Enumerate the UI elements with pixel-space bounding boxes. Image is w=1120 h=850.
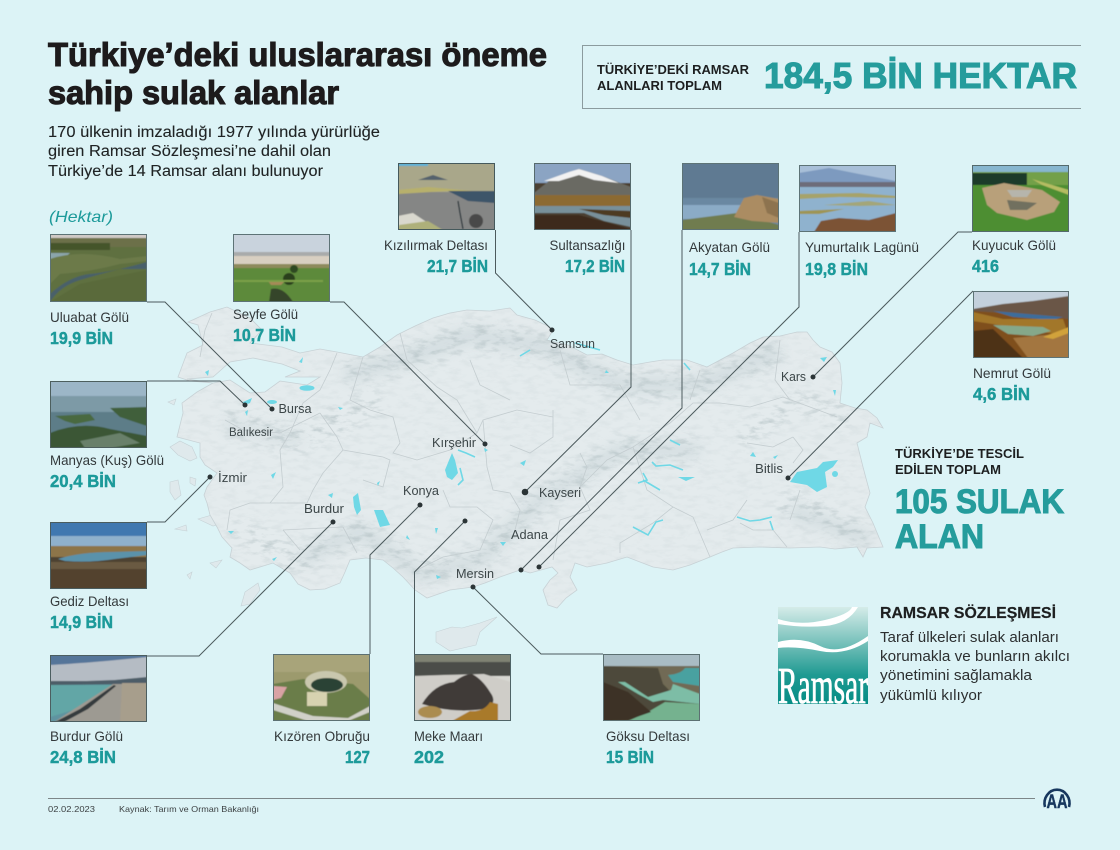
map city label: Bursa: Bursa: [278, 402, 312, 416]
photo: Gediz Deltası: [50, 522, 147, 589]
registered label: [895, 446, 1024, 477]
leader line: Yumurtalık Lagünü: [536, 232, 799, 570]
leader line: Gediz Deltası to İzmir: [147, 474, 212, 522]
lake: Beyşehir: [353, 493, 361, 515]
value: 10,7 BİN: [233, 325, 296, 345]
name: Burdur Gölü: [50, 728, 123, 744]
photo: Göksu Deltası: [603, 654, 700, 721]
name: Yumurtalık Lagünü: [805, 239, 919, 255]
registered label: TÜRKİYE’DE TESCİL: [895, 446, 1024, 461]
value: 21,7 BİN: [427, 256, 488, 276]
lake: Suğla: [374, 510, 390, 527]
photo: Kızören Obruğu: [273, 654, 370, 721]
name: Kuyucuk Gölü: [972, 237, 1056, 253]
name: Akyatan Gölü: [689, 239, 770, 255]
name: Meke Maarı: [414, 728, 483, 744]
map city label: Kırşehir: Kırşehir: [432, 436, 476, 450]
card: Gediz Deltası: [50, 522, 147, 632]
leader line: Kızören Obruğu to Konya: [370, 502, 422, 654]
subtitle text: [48, 124, 380, 180]
leader line: Kuyucuk Gölü to Kars: [810, 232, 972, 380]
photo: Uluabat Gölü: [50, 234, 147, 302]
name: Nemrut Gölü: [973, 365, 1051, 381]
value: 15 BİN: [606, 747, 654, 767]
name: Kızören Obruğu: [274, 728, 370, 744]
map city label: Balıkesir: Balıkesir: [229, 427, 273, 439]
name: Manyas (Kuş) Gölü: [50, 452, 164, 468]
subtitle text: 170 ülkenin imzaladığı 1977 yılında yürürlüğe: [48, 124, 380, 141]
panel: Ramsar Convention: [778, 603, 1070, 715]
lake: Erçek: [832, 471, 838, 477]
leader line: Sultansazlığı to Kayseri: [522, 230, 631, 495]
map: land silhouette: [177, 307, 883, 608]
map: province borders: [200, 313, 837, 570]
lake: Van: [790, 460, 838, 492]
footer source: Kaynak: Tarım ve Orman Bakanlığı: [119, 804, 259, 814]
value: 24,8 BİN: [50, 747, 116, 767]
panel: total Ramsar area: [582, 46, 1081, 108]
card: Göksu Deltası: [603, 654, 700, 767]
map: Turkey relief map: [150, 300, 890, 651]
name: Gediz Deltası: [50, 593, 129, 609]
map: islands and Cyprus: [168, 399, 497, 651]
photo: Sultansazlığı: [534, 163, 631, 230]
lake: Tuz: [445, 453, 458, 480]
value: 14,7 BİN: [689, 259, 751, 279]
leader line: Meke Maarı: [414, 518, 468, 654]
map city label: Samsun: Samsun: [550, 337, 595, 351]
Ramsar heading: RAMSAR SÖZLEŞMESİ: [880, 603, 1056, 622]
title: Türkiye’deki uluslararası öneme: [48, 36, 547, 73]
Ramsar description: korumakla ve bunların akılcı: [880, 648, 1070, 665]
Ramsar description: [880, 629, 1070, 704]
title: [48, 36, 547, 111]
photo: Kızılırmak Deltası: [398, 163, 495, 230]
map city label: Kars: Kars: [781, 370, 806, 384]
value: 14,9 BİN: [50, 612, 113, 632]
total label: [597, 62, 749, 93]
value: 19,8 BİN: [805, 259, 868, 279]
name: Seyfe Gölü: [233, 306, 298, 322]
map: rivers and dam reservoirs: [458, 343, 773, 535]
value: 4,6 BİN: [973, 384, 1030, 404]
name: Uluabat Gölü: [50, 309, 129, 325]
leader line: Akyatan Gölü to Adana: [518, 230, 682, 572]
panel: registered wetlands total: [895, 446, 1064, 556]
card: Sultansazlığı: [534, 163, 631, 276]
value: 19,9 BİN: [50, 328, 113, 348]
map: mountain relief texture: [220, 314, 876, 586]
leader line: Göksu Deltası to Mersin: [470, 584, 603, 654]
registered value: 105 SULAK: [895, 483, 1064, 521]
value: 202: [414, 747, 444, 767]
map city label: İzmir: İzmir: [218, 471, 247, 485]
Ramsar description: yükümlü kılıyor: [880, 687, 982, 704]
registered label: EDİLEN TOPLAM: [895, 462, 1001, 477]
lake: İznik: [300, 385, 314, 391]
map city label: Konya: Konya: [403, 484, 439, 498]
value: 20,4 BİN: [50, 471, 116, 491]
registered value: ALAN: [895, 518, 984, 556]
photo: Akyatan Gölü: [682, 163, 779, 230]
photo: Seyfe Gölü: [233, 234, 330, 302]
card: Kuyucuk Gölü: [972, 165, 1069, 276]
value: 416: [972, 256, 999, 276]
card: Yumurtalık Lagünü: [799, 165, 919, 279]
card: Kızılırmak Deltası: [384, 163, 495, 276]
lake: Manyas: [243, 398, 252, 405]
value: 127: [345, 747, 370, 767]
name: Kızılırmak Deltası: [384, 237, 488, 253]
leader line: Kızılırmak Deltası to Samsun: [496, 230, 554, 332]
card: Kızören Obruğu: [273, 654, 370, 767]
name: Sultansazlığı: [550, 237, 626, 253]
lake: Hazar: [678, 477, 695, 481]
map city label: Burdur: Burdur: [304, 502, 344, 516]
map: lakes and reservoirs: [205, 357, 838, 579]
card: Meke Maarı: [414, 654, 511, 767]
photo: Yumurtalık Lagünü: [799, 165, 896, 232]
map city label: Bitlis: Bitlis: [755, 462, 783, 476]
icon: Anadolu Agency logo: AA: [1046, 792, 1068, 813]
small lakes: [205, 357, 836, 579]
leader line: Nemrut Gölü to Bitlis: [786, 291, 973, 480]
unit label: Hektar: (Hektar): [49, 209, 113, 226]
leader line: Seyfe Gölü to Kırşehir: [330, 302, 488, 446]
icon: Ramsar logo: [778, 607, 868, 715]
leader line: Burdur Gölü to Burdur: [147, 520, 336, 656]
Ramsar description: yönetimini sağlamakla: [880, 667, 1033, 684]
card: Seyfe Gölü: [233, 234, 330, 345]
subtitle text: giren Ramsar Sözleşmesi’ne dahil olan: [48, 143, 331, 160]
map city label: Kayseri: Kayseri: [539, 486, 581, 500]
total value: 184,5 BİN HEKTAR: [764, 55, 1077, 96]
map city label: Adana: Adana: [511, 528, 548, 542]
subtitle text: Türkiye’de 14 Ramsar alanı bulunuyor: [48, 163, 323, 180]
Ramsar description: Taraf ülkeleri sulak alanları: [880, 629, 1059, 646]
name: Göksu Deltası: [606, 728, 690, 744]
lake: Uluabat: [267, 400, 277, 404]
card: Burdur Gölü: [50, 655, 147, 767]
leader line: Manyas Gölü to Balıkesir: [147, 381, 248, 408]
footer: [48, 790, 1070, 814]
map city label: Mersin: Mersin: [456, 567, 494, 581]
card: Manyas (Kuş) Gölü: [50, 381, 164, 491]
card: Uluabat Gölü: [50, 234, 147, 348]
leader line: Uluabat Gölü to Bursa: [147, 302, 274, 412]
title: sahip sulak alanlar: [48, 74, 339, 111]
value: 17,2 BİN: [565, 256, 625, 276]
lake: Çıldır: [820, 357, 827, 362]
photo: Kuyucuk Gölü: [972, 165, 1069, 232]
total label: TÜRKİYE’DEKİ RAMSAR: [597, 62, 749, 77]
card: Nemrut Gölü: [973, 291, 1069, 404]
photo: Manyas Gölü: [50, 381, 147, 448]
footer date: 02.02.2023: [48, 804, 95, 814]
icon: Ramsar logo: Ramsar: [778, 658, 868, 715]
card: Akyatan Gölü: [682, 163, 779, 279]
registered value: [895, 483, 1064, 556]
photo: Burdur Gölü: [50, 655, 147, 722]
photo: Meke Maarı: [414, 654, 511, 721]
photo: Nemrut Gölü: [973, 291, 1069, 358]
total label: ALANLARI TOPLAM: [597, 79, 722, 93]
